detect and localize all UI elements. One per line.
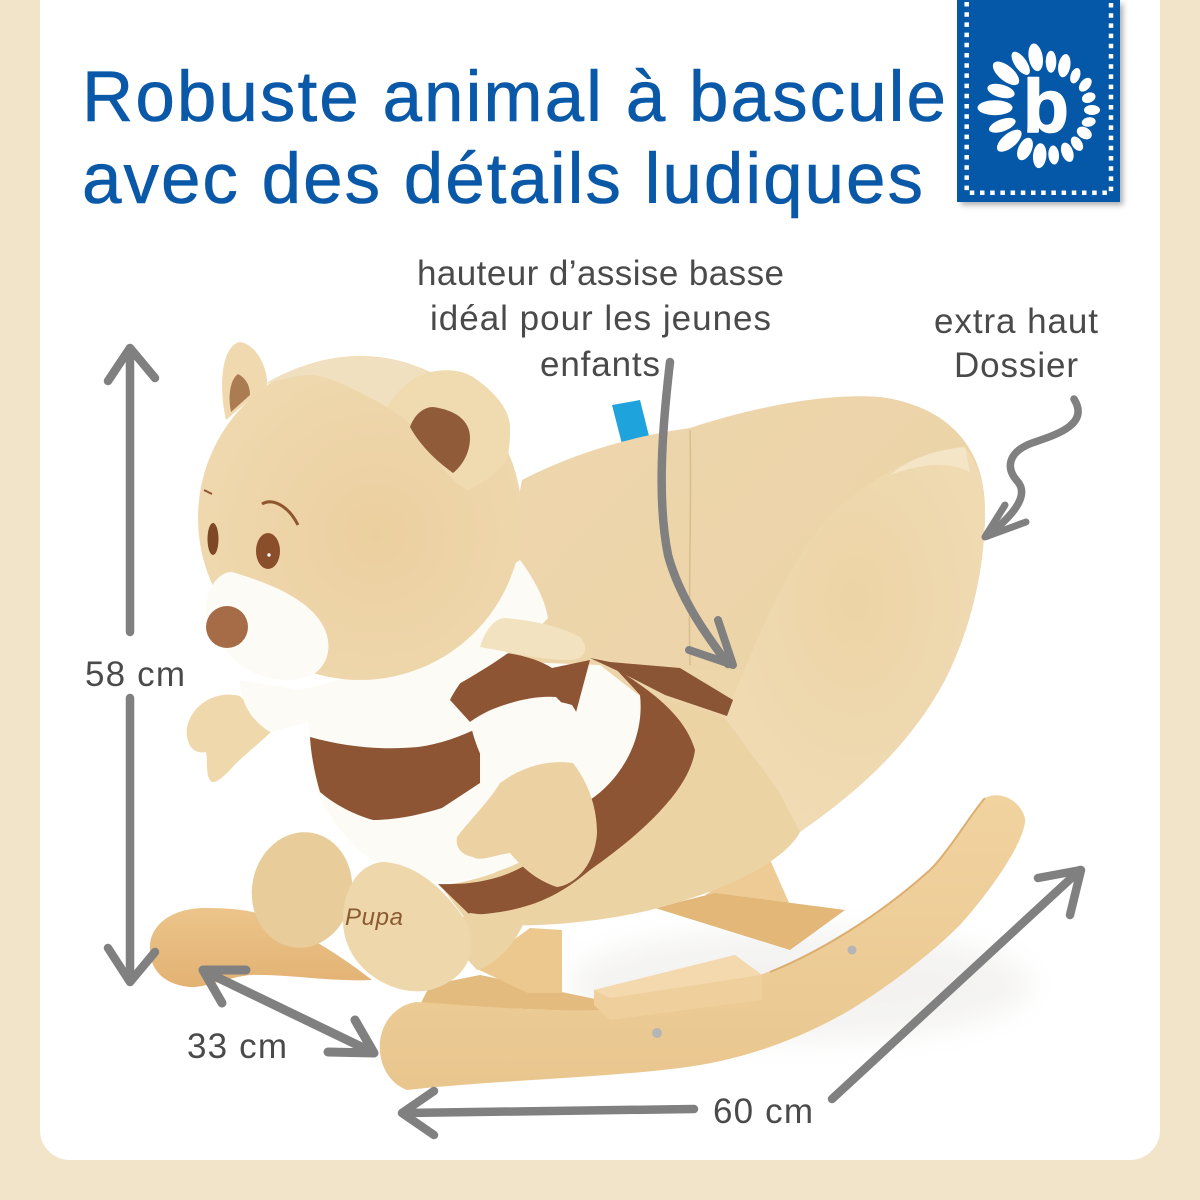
label: extra high backrest	[934, 302, 1098, 385]
label: low seat height	[417, 254, 784, 384]
handle	[480, 618, 585, 660]
label: 58 cm: 58 cm	[85, 655, 185, 694]
footrest	[594, 955, 762, 1020]
eyes	[256, 533, 280, 569]
arrow: seat height	[662, 362, 733, 665]
back ear	[222, 342, 267, 420]
rockers and wooden base	[150, 795, 1025, 1090]
icon: brand logo	[957, 0, 1123, 205]
floor shadow	[570, 930, 1030, 1040]
title: Robuste animal à bascule	[82, 58, 946, 137]
label: low seat height: hauteur d’assise basse	[417, 254, 784, 293]
seat back	[480, 396, 985, 925]
nose	[206, 606, 248, 648]
label: 33 cm: 33 cm	[187, 1027, 287, 1066]
seat floor	[620, 668, 745, 716]
strap	[590, 658, 733, 716]
label: 60 cm: 60 cm	[713, 1092, 813, 1131]
label: low seat height: idéal pour les jeunes	[430, 299, 771, 338]
shirt body	[308, 652, 695, 915]
inner lip highlight	[890, 447, 970, 475]
illustration: rocking bear	[150, 342, 1030, 1090]
arrow: backrest	[985, 399, 1078, 537]
arrow: depth dimension	[203, 970, 374, 1053]
label: low seat height: enfants	[540, 345, 660, 384]
arms and legs	[187, 695, 597, 991]
muzzle	[206, 572, 328, 680]
arrow: width dimension	[402, 870, 1081, 1135]
side wing	[725, 447, 985, 832]
title: avec des détails ludiques	[82, 140, 923, 219]
tag	[612, 400, 649, 444]
head	[198, 356, 522, 680]
head crown	[263, 357, 427, 407]
foot label: Pupa	[345, 904, 403, 931]
label: extra high backrest: extra haut	[934, 302, 1098, 341]
right ear	[387, 370, 510, 490]
title	[82, 58, 946, 219]
icon: brand logo: b	[1023, 64, 1069, 148]
label: extra high backrest: Dossier	[954, 346, 1078, 385]
collar	[240, 560, 548, 732]
belly plush	[440, 700, 800, 925]
arrow: height dimension	[108, 348, 155, 982]
